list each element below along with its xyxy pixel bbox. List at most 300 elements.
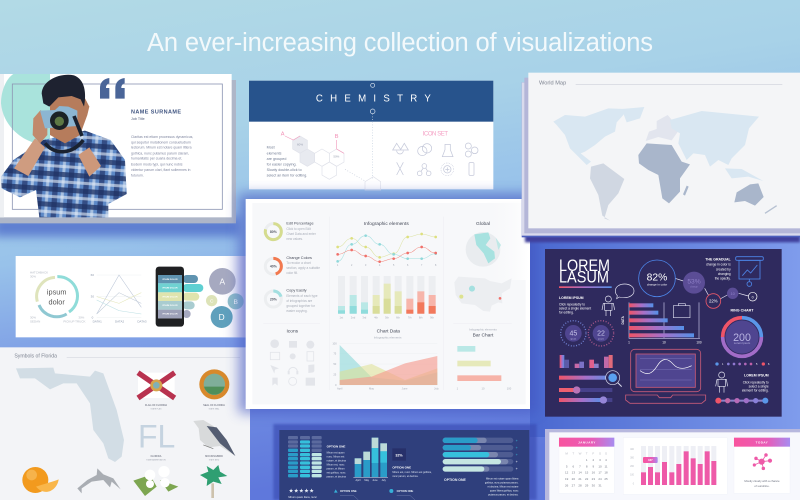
heading: icon set: ICON SET <box>423 132 448 138</box>
bubble chart <box>206 268 244 328</box>
today card: Mostly cloudy with a chance <box>744 479 780 483</box>
calendar card: 26 <box>565 483 569 487</box>
calendar card: 16 <box>592 471 595 475</box>
line chart: 5 <box>393 263 395 267</box>
heading: chemistry: CHEMISTRY <box>316 94 431 105</box>
line chart: 60 <box>91 273 94 277</box>
calendar card: 31 <box>598 483 602 487</box>
symbol captions top: FLAG OF FLORIDA <box>145 404 167 407</box>
calendar card: 8 <box>586 464 588 468</box>
icon set <box>393 143 478 176</box>
32 percent callout: Mirum est, nunc. Mirum est gothica, <box>392 471 432 474</box>
chemistry description text: are grouped <box>267 157 286 161</box>
horizontal gradient bars: 1 <box>628 341 630 345</box>
chemistry description text: select an item for editing. <box>267 174 307 178</box>
horizontal gradient bars: 10 <box>662 341 666 345</box>
stacked bar chart: 4th <box>374 316 378 320</box>
gauge descriptions: Chart Data and enter <box>286 232 316 236</box>
stacked column chart <box>353 438 388 482</box>
calendar card: JANUARY <box>578 440 596 444</box>
the gradual text <box>705 258 732 281</box>
section headings: Global <box>476 221 490 227</box>
stacked bar chart: 9th <box>430 316 434 320</box>
icon: flag of florida <box>138 373 175 398</box>
chemistry description text <box>267 146 307 178</box>
lorem ipsum text right: element for editing. <box>742 388 769 392</box>
heading: world map: World Map <box>539 81 566 87</box>
pink bar chart card: 200 <box>630 466 635 468</box>
section subheadings: Infographic elements <box>374 336 402 340</box>
area chart: 0 <box>335 383 337 387</box>
stacked bar chart: 5th <box>385 316 389 320</box>
hexagon molecule diagram <box>293 136 381 190</box>
calendar card: 6 <box>572 464 574 468</box>
panel: infographic elements dashboard <box>238 193 537 413</box>
calendar card: 11 <box>604 464 608 468</box>
line chart: 4 <box>379 263 381 267</box>
horizontal bar chart: 1 <box>457 386 459 390</box>
gauge descriptions: Elements of each type <box>286 294 318 298</box>
heading: lorem lasum: LASUM <box>559 269 609 287</box>
horizontal bar chart: 100 <box>507 386 512 390</box>
progress bars: + <box>516 467 518 471</box>
line chart: 8 <box>435 263 437 267</box>
area chart: 75 <box>333 352 337 356</box>
stacked column chart: July <box>381 479 387 482</box>
line chart: 30 <box>91 294 94 298</box>
bubble 22 percent: 22% <box>709 299 718 304</box>
icon: jasmine flower <box>133 466 178 496</box>
calendar card: 30 <box>592 483 595 487</box>
today card: of sunshine. <box>754 484 770 488</box>
gauges: 22 <box>597 331 605 338</box>
testimonial body text: Eodem modo typi, qui nunc nobis <box>131 162 183 166</box>
horizontal bar chart <box>457 346 512 390</box>
calendar card: 1 <box>586 458 588 462</box>
gauges <box>561 321 614 346</box>
bubble 10 and 0: 10 <box>730 291 736 296</box>
progress bars: + <box>516 453 518 457</box>
calendar card: 3 <box>599 458 601 462</box>
testimonial body text: lectorum. Mirum est notare quam littera <box>131 146 192 150</box>
the gradual text: the opacity. <box>715 277 731 281</box>
gauge descriptions: Copy Easily <box>286 289 307 293</box>
stacked bar chart: 7th <box>408 316 412 320</box>
icon: palm tree <box>200 465 227 498</box>
area chart: June <box>402 386 408 390</box>
the gradual text: changing <box>718 272 731 276</box>
icon: mockingbird <box>193 420 235 456</box>
bubble 53 percent: change <box>690 286 699 288</box>
calendar card: 18 <box>604 471 608 475</box>
heading: lorem lasum <box>559 257 610 287</box>
chemistry description text: elements <box>267 151 282 155</box>
title: An ever-increasing collection of visualizations <box>147 29 653 57</box>
pink bar chart card: 0 <box>633 483 635 485</box>
gauge descriptions: Edit Percentage <box>286 221 314 225</box>
gauge descriptions: color fill. <box>286 271 298 275</box>
name and job title: NAME SURNAME <box>131 109 181 115</box>
lorem ipsum text left <box>559 296 591 314</box>
fl abbreviation: FL <box>138 418 175 454</box>
icon: speech bubble <box>615 284 634 299</box>
lorem ipsum text right: Click repeatedly to <box>743 380 769 384</box>
area chart: April <box>337 386 343 390</box>
ring chart <box>723 318 761 356</box>
section headings <box>287 221 494 339</box>
bubble chart: A <box>220 276 226 286</box>
phone with option rows: IPSUM DOLOR <box>162 296 178 298</box>
icon: orange <box>22 467 59 493</box>
line chart: 7 <box>421 263 423 267</box>
option one text: Mirum est quam <box>327 451 344 454</box>
phone with option rows: IPSUM DOLOR <box>162 279 178 281</box>
panel: small infographic strip: 30% <box>30 274 36 278</box>
symbol captions middle: STATE BIRD <box>209 458 220 461</box>
bubble 53 percent <box>683 272 705 294</box>
calendar card: 4 <box>605 458 607 462</box>
panel: chemistry: 60% <box>297 142 303 146</box>
icon: dolphin <box>77 468 121 493</box>
area chart: 25 <box>333 372 337 376</box>
numbered dot row: 5 <box>756 363 758 366</box>
option one right text: et decima. Mirum est notare <box>488 485 519 488</box>
progress bars: + <box>516 439 518 443</box>
calendar card: 17 <box>598 471 602 475</box>
donut gauges: 80% <box>270 230 277 234</box>
testimonial body text: qui sequitur mutationem consuetudium <box>131 140 191 144</box>
bubble 53 percent: 53% <box>687 278 701 285</box>
the gradual text: created by <box>716 267 731 271</box>
panel: chemistry: A <box>281 131 285 137</box>
map: florida <box>16 368 124 462</box>
lorem ipsum text left: LOREM IPSUM <box>559 296 584 300</box>
numbered dot row: 6 <box>768 363 770 366</box>
ring chart: 200 <box>733 332 751 344</box>
symbol captions top: STATE FLAG <box>151 407 162 410</box>
phone with option rows <box>156 267 203 327</box>
pink bar chart card: 400 <box>630 449 635 451</box>
gauge descriptions: Click to open Edit <box>286 227 311 231</box>
panel: testimonial profile <box>0 74 240 237</box>
32 percent callout: nunc parum, et decima. <box>392 475 419 478</box>
sliders <box>559 371 622 404</box>
icon: person <box>716 372 728 393</box>
option one right text: quam littera gothica, nunc <box>490 489 519 492</box>
lorem ipsum text left: select a single element <box>559 306 591 310</box>
stacked column chart: April <box>356 479 361 482</box>
line chart: 1 <box>337 263 339 267</box>
section subheadings <box>374 327 497 340</box>
calendar card: 7 <box>579 464 581 468</box>
calendar card: S <box>599 452 601 456</box>
area chart: 100 <box>332 341 337 345</box>
option one text: OPTION ONE <box>327 445 345 449</box>
calendar card: 21 <box>578 477 582 481</box>
chemistry description text: Most <box>267 146 275 150</box>
calendar card: 12 <box>565 471 569 475</box>
testimonial body text: videntur parum clari, fiant sollemnes in <box>131 168 191 172</box>
pill columns <box>288 436 322 477</box>
lorem ipsum text left: Click repeatedly to <box>559 302 585 306</box>
calendar card: 22 <box>585 477 589 481</box>
star rating and options: OPTION ONE <box>340 489 357 493</box>
chemistry description text: Slowly double-click to <box>267 168 302 172</box>
testimonial body text <box>131 135 193 178</box>
the gradual text: change in color is <box>706 263 731 267</box>
calendar card: 20 <box>572 477 575 481</box>
bubble 82 percent <box>639 260 675 297</box>
option one right text: Mirum est notare quam littera <box>486 477 519 480</box>
bubble connectors <box>675 278 748 299</box>
donut gauges <box>265 224 281 307</box>
bubble 82 percent: change in color <box>647 283 667 287</box>
progress bars: + <box>516 460 518 464</box>
star rating and options <box>288 489 415 500</box>
symbol captions middle <box>146 455 223 461</box>
option one text: parum, et Mirum <box>327 467 345 470</box>
ring chart: Lorem Ipsum <box>734 341 751 345</box>
area chart: 50 <box>333 362 337 366</box>
icon: quotation marks <box>100 78 125 99</box>
heading: symbols of florida: Symbols of Florida <box>14 354 57 360</box>
phone with option rows: IPSUM DOLOR <box>162 288 178 290</box>
testimonial body text: humanitatis per cuaria decima et. <box>131 157 182 161</box>
progress bars: + <box>516 446 518 450</box>
line chart: 3 <box>365 263 367 267</box>
icon: molecule <box>753 454 772 470</box>
symbol captions middle: FLORIDA <box>151 455 162 458</box>
donut label: dolor <box>49 298 65 307</box>
32 percent callout: OPTION ONE <box>392 466 411 470</box>
usa map with markers <box>454 277 512 312</box>
today card <box>734 438 790 493</box>
numbered dot row <box>715 362 770 366</box>
stacked column chart: June <box>372 479 378 482</box>
option one text: nunc. Mirum est <box>327 455 345 458</box>
name and job title <box>131 109 181 121</box>
gauges: ipsum <box>570 338 576 340</box>
line chart: 0 <box>92 316 94 320</box>
stacked bar chart: 8th <box>419 316 423 320</box>
calendar card: 28 <box>578 483 582 487</box>
icon: person <box>602 296 615 316</box>
symbol captions middle: MOCKINGBIRD <box>205 455 223 458</box>
coloured step dots <box>715 398 768 404</box>
calendar card: T <box>586 452 588 456</box>
panel: small infographic strip: HATCHBACK <box>30 271 48 275</box>
calendar card: 15 <box>585 471 589 475</box>
numbered dot row: 1 <box>722 363 724 366</box>
heading: ring chart: RING CHART <box>731 309 754 313</box>
line chart: DATA3 <box>137 320 147 324</box>
calendar card <box>559 438 614 493</box>
gauge descriptions: of infographics are <box>286 299 313 303</box>
panel: small infographic strip <box>16 256 248 337</box>
lorem ipsum text right: select a single <box>749 384 769 388</box>
gauges: 45 <box>569 331 577 338</box>
pink bar chart card <box>623 438 727 494</box>
panel: small infographic strip: 30% <box>78 316 85 320</box>
star rating and options: OPTION ONE <box>397 489 414 493</box>
bubble 10 and 0 <box>727 288 757 301</box>
calendar card: 29 <box>585 483 589 487</box>
option one text <box>327 445 346 478</box>
pink bar chart card: 300 <box>630 458 635 460</box>
calendar card: 9 <box>592 464 594 468</box>
bubble chart: D <box>219 312 225 322</box>
pink bar chart card: 167 <box>648 458 653 462</box>
panel: small infographic strip: SEDAN <box>30 319 40 323</box>
horizontal gradient bars: 100 <box>696 341 702 345</box>
panel: chemistry: B <box>335 134 339 140</box>
donut label <box>47 288 66 307</box>
option one right text: gothica, nunc putamus parum, <box>485 481 519 484</box>
calendar card: 23 <box>592 477 595 481</box>
section subheadings: Infographic elements <box>469 327 497 331</box>
gauge descriptions: To recolor a chart <box>286 261 311 265</box>
option one right text: OPTION ONE <box>444 478 467 482</box>
horizontal gradient bars <box>621 302 702 345</box>
star rating and options: ★★★★★ <box>289 489 314 495</box>
panel: symbols of florida <box>0 347 250 500</box>
donut chart <box>37 277 78 317</box>
line chart: DATA1 <box>93 320 102 324</box>
laptop <box>626 349 706 403</box>
stacked column chart: May <box>364 479 370 482</box>
calendar card: 14 <box>578 471 582 475</box>
panel: world map <box>522 73 800 242</box>
testimonial body text: gothica, nunc putamus parum claram, <box>131 151 189 155</box>
donut label: ipsum <box>47 288 66 297</box>
panel: small infographic strip: PICKUP TRUCK <box>63 319 85 323</box>
line chart: 2 <box>351 263 353 267</box>
calendar card: 13 <box>572 471 575 475</box>
symbol captions top <box>145 404 225 410</box>
pink bar chart card: 100 <box>630 474 635 476</box>
bubble 22 percent <box>706 294 721 308</box>
calendar card: 2 <box>592 458 594 462</box>
calendar card: 19 <box>565 477 569 481</box>
icon: briefcase <box>673 304 690 318</box>
stacked bar chart: 1st <box>340 316 343 320</box>
section headings: Icons <box>287 329 299 335</box>
panel: chemistry <box>249 81 493 190</box>
area chart <box>332 341 439 390</box>
calendar card: S <box>605 452 607 456</box>
photo: man with camera <box>1 75 127 217</box>
donut gauges: 20% <box>270 297 277 301</box>
bubble 82 percent: 82% <box>647 272 667 283</box>
donut gauges: 40% <box>270 265 277 269</box>
section headings: Infographic elements <box>364 221 409 227</box>
option one right text: putamus parum, et decima. <box>488 493 519 496</box>
bubble 10 and 0: 0 <box>752 295 754 299</box>
gauge descriptions <box>286 221 320 313</box>
stacked bar chart: 6th <box>396 316 400 320</box>
calendar card: M <box>565 452 568 456</box>
globe <box>466 232 501 267</box>
heading: lorem lasum: LOREM <box>559 257 610 275</box>
testimonial body text: Claritas est etiam processus dynamicus, <box>131 135 193 139</box>
panel: lorem lasum dark infographic <box>545 249 782 417</box>
panel: chemistry: 50% <box>333 154 340 158</box>
lorem ipsum text right: LOREM IPSUM <box>744 374 769 378</box>
line chart <box>336 233 437 267</box>
line chart <box>91 273 147 324</box>
option one text: est gothica, nunc <box>327 471 346 474</box>
calendar card: F <box>592 452 594 456</box>
calendar card: 25 <box>604 477 608 481</box>
the gradual text: THE GRADUAL <box>705 258 732 262</box>
panel: dark dashboard <box>273 424 537 500</box>
calendar card: W <box>579 452 582 456</box>
gauge descriptions: section, apply a suitable <box>286 266 320 270</box>
lorem ipsum text right <box>742 374 769 392</box>
area chart: July <box>434 386 439 390</box>
progress bars <box>443 438 518 472</box>
symbol captions middle: STATE ABBREVIATION <box>146 458 166 461</box>
bubble chart: B <box>233 299 238 306</box>
icon: seal of florida <box>199 369 229 399</box>
gauge descriptions: easier copying. <box>286 309 308 313</box>
panel: calendar dashboard <box>545 429 800 500</box>
phone with option rows: IPSUM DOLOR <box>162 314 178 316</box>
area chart: May <box>369 386 375 390</box>
line chart: DATA2 <box>115 320 125 324</box>
panel: small infographic strip: 30% <box>30 316 36 320</box>
symbol captions top: SEAL OF FLORIDA <box>203 404 225 407</box>
stacked bar chart: 3rd <box>362 316 367 320</box>
today card: TODAY <box>756 440 768 444</box>
option one text: Mirum est, nunc <box>327 463 345 466</box>
icon grid <box>270 339 315 386</box>
horizontal gradient bars: DATA <box>621 315 625 324</box>
symbol captions top: STATE SEAL <box>209 407 219 410</box>
calendar card: T <box>572 452 574 456</box>
line chart: 6 <box>407 263 409 267</box>
calendar card: 24 <box>598 477 602 481</box>
section headings: Chart Data <box>377 329 400 335</box>
option one text: notare, et decima <box>327 459 346 462</box>
testimonial body text: futurum. <box>131 174 144 178</box>
icon: presentation board <box>736 257 763 286</box>
option one text: parum, et decima <box>327 475 346 478</box>
option one right text <box>444 477 519 496</box>
chemistry description text: for easier copying. <box>267 163 297 167</box>
calendar card: 27 <box>572 483 575 487</box>
gauge descriptions: grouped together for <box>286 304 315 308</box>
calendar card: 5 <box>566 464 568 468</box>
section headings: Bar Chart <box>473 333 494 339</box>
calendar card: 10 <box>598 464 602 468</box>
small column pairs <box>560 355 613 368</box>
32 percent callout: 32% <box>395 453 403 457</box>
map: continents <box>553 107 777 221</box>
gauge descriptions: Change Colors <box>286 256 312 260</box>
bubble chart: C <box>210 299 214 305</box>
stacked bar chart: 2nd <box>351 316 356 320</box>
name and job title: Job Title <box>131 117 145 121</box>
phone with option rows: IPSUM DOLOR <box>162 305 178 307</box>
horizontal bar chart: 10 <box>482 386 485 390</box>
gauges: ipsum <box>598 338 604 340</box>
lorem ipsum text left: for editing. <box>559 310 574 314</box>
star rating and options: Mirum quam litera, nunc <box>288 495 317 499</box>
32 percent callout <box>392 448 432 478</box>
gauge descriptions: new values. <box>286 237 303 241</box>
stacked bar chart <box>338 276 436 320</box>
